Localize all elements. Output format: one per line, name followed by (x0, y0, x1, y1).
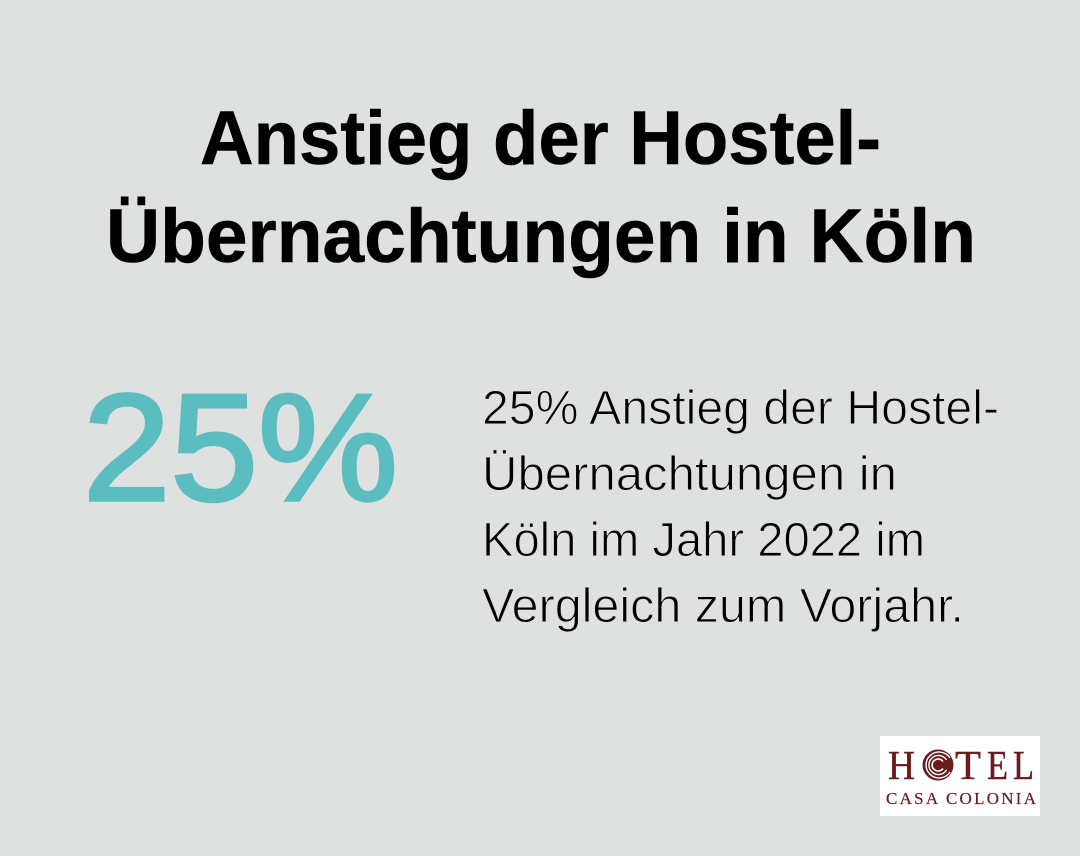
big number: 25%: 25% (83, 363, 398, 533)
description text: 25% Anstieg der Hostel- (482, 382, 999, 435)
logo wordmark: HOTEL: E (987, 742, 1008, 788)
logo wordmark: HOTEL: T (955, 742, 981, 788)
description text: Köln im Jahr 2022 im (482, 514, 925, 567)
title (106, 96, 976, 279)
description text (482, 382, 999, 633)
logo wordmark: HOTEL (888, 742, 1034, 788)
logo icon: concentric circle O (922, 750, 954, 780)
title: Übernachtungen in Köln (106, 194, 976, 279)
title: Anstieg der Hostel- (200, 96, 881, 181)
logo wordmark: HOTEL: L (1013, 742, 1034, 788)
logo subtitle: CASA COLONIA: CASA COLONIA (886, 789, 1037, 808)
description text: Übernachtungen in (482, 448, 897, 501)
logo wordmark: HOTEL: H (888, 742, 915, 788)
description text: Vergleich zum Vorjahr. (482, 580, 964, 633)
logo: Hotel Casa Colonia (880, 736, 1040, 816)
